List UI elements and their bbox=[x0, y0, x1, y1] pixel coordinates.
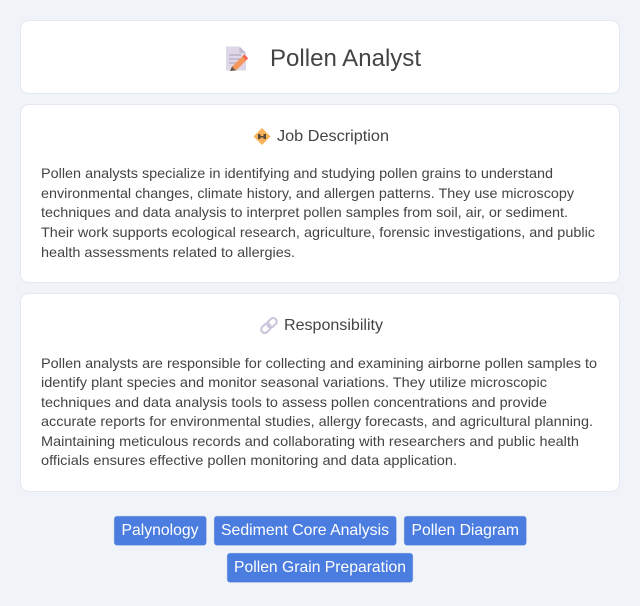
text block: job description: environmental changes, climate history, and allergen patterns. They use microscopy bbox=[41, 185, 574, 201]
tag: Sediment Core Analysis bbox=[214, 516, 396, 546]
tag: Pollen Grain Preparation bbox=[227, 553, 413, 582]
icon: chain link bbox=[260, 317, 278, 334]
tag: Sediment Core Analysis: Sediment Core Analysis bbox=[221, 522, 389, 539]
text block: responsibility: techniques and data analysis tools to assess pollen concentrations and provide bbox=[41, 394, 547, 410]
text block: responsibility: officials ensures effective pollen monitoring and data application. bbox=[41, 452, 457, 468]
tag: Pollen Grain Preparation: Pollen Grain Preparation bbox=[234, 559, 406, 576]
panel: job description bbox=[20, 104, 620, 282]
tag: Pollen Diagram: Pollen Diagram bbox=[412, 522, 519, 539]
title: Pollen Analyst bbox=[270, 45, 421, 72]
text block: job description: techniques and data analysis to interpret pollen samples from soil, air, or sediment. bbox=[41, 204, 568, 220]
text block: responsibility: Maintaining meticulous records and collaborating with researchers and public health bbox=[41, 433, 579, 449]
text block: job description: Pollen analysts specialize in identifying and studying pollen grains to understand bbox=[41, 165, 553, 181]
heading: job description: Job Description bbox=[277, 128, 389, 145]
tag: Palynology: Palynology bbox=[122, 522, 198, 539]
heading: responsibility: Responsibility bbox=[284, 317, 383, 334]
text block: responsibility bbox=[41, 355, 597, 468]
icon: orange diamond bbox=[254, 128, 270, 145]
text block: job description bbox=[41, 165, 595, 260]
panel: responsibility bbox=[20, 294, 620, 492]
icon: document with pencil bbox=[226, 46, 248, 71]
text block: job description: Their work supports ecological research, agriculture, forensic investigations, and public bbox=[41, 224, 595, 240]
text block: responsibility: accurate reports for environmental studies, allergy forecasts, and agricultural planning. bbox=[41, 413, 593, 429]
panel: title card bbox=[20, 20, 620, 94]
text block: responsibility: Pollen analysts are responsible for collecting and examining airborne pollen samples to bbox=[41, 355, 597, 371]
tag: Pollen Diagram bbox=[404, 516, 526, 546]
tag: Palynology bbox=[114, 516, 206, 546]
text block: job description: health assessments related to allergies. bbox=[41, 244, 295, 260]
text block: responsibility: identify plant species and monitor seasonal variations. They utilize microscopic bbox=[41, 374, 547, 390]
